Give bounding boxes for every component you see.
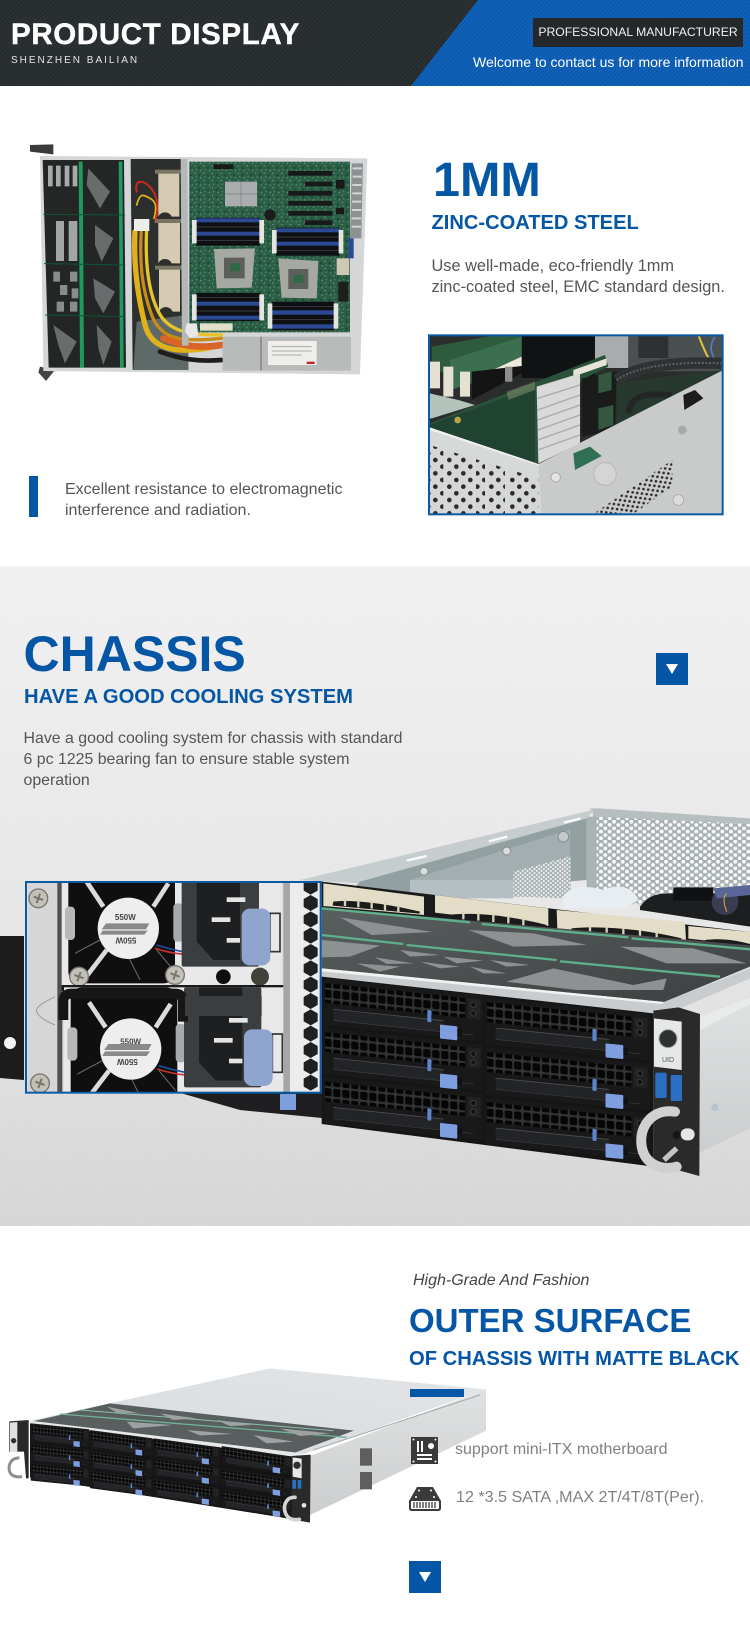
chassis walls (538, 370, 723, 515)
image: assembled server (8, 1368, 486, 1523)
side (699, 997, 750, 1153)
power supply (223, 337, 351, 371)
chassis description: operation (24, 772, 90, 788)
feature: storage (409, 1487, 704, 1511)
feature text: motherboard: support mini-ITX motherboard (455, 1440, 668, 1458)
textured grey background with server: 550W (120, 1038, 142, 1047)
textured grey background with server: 550W (115, 913, 136, 922)
textured grey background with server: UID (662, 1057, 674, 1064)
tagline: High-Grade And Fashion (413, 1272, 589, 1288)
description: zinc-coated steel, EMC standard design. (432, 278, 725, 296)
resistance text: interference and radiation. (65, 502, 251, 518)
chassis description: Have a good cooling system for chassis with standard (24, 730, 402, 746)
accent bar (29, 476, 38, 517)
front (322, 977, 653, 1167)
contact line: Welcome to contact us for more information (473, 54, 744, 70)
panel: zinc-coated steel (29, 144, 725, 518)
badge: professional manufacturer: PROFESSIONAL MANUFACTURER (538, 25, 738, 39)
feature: motherboard (411, 1437, 668, 1464)
textured grey background with server (0, 566, 750, 1226)
resistance text: Excellent resistance to electromagnetic (65, 480, 342, 498)
resistance text (65, 480, 342, 518)
big number heading: 1MM (433, 153, 541, 207)
description: Use well-made, eco-friendly 1mm (432, 256, 674, 274)
rear frame (590, 808, 750, 907)
panel: chassis (0, 566, 750, 1226)
rear IO slats (350, 163, 363, 238)
chassis description (24, 730, 402, 788)
image: open chassis top view (30, 144, 368, 381)
subtitle: SHENZHEN BAILIAN (11, 54, 139, 66)
textured grey background with server: 550W (116, 1057, 138, 1066)
lip (322, 968, 750, 1014)
outer surface heading: OUTER SURFACE (409, 1302, 691, 1339)
icon: down arrow (409, 1561, 441, 1593)
panel: outer surface (8, 1272, 740, 1593)
badge: professional manufacturer (533, 18, 743, 47)
handle ear (653, 1007, 700, 1176)
icon: hard drive (409, 1487, 441, 1511)
feature text: storage: 12 *3.5 SATA ,MAX 2T/4T/8T(Per). (456, 1488, 704, 1506)
cable bay (131, 159, 188, 370)
decals (43, 160, 126, 368)
header background: dark with blue diagonal (0, 0, 750, 86)
title: PRODUCT DISPLAY (11, 18, 300, 50)
header banner (0, 0, 750, 86)
image: card closeup (428, 334, 724, 516)
fan ducts (322, 882, 750, 947)
chassis description: 6 pc 1225 bearing fan to ensure stable system (24, 750, 349, 768)
description (432, 256, 725, 296)
subheading: ZINC-COATED STEEL (432, 212, 639, 234)
outer surface subheading: OF CHASSIS WITH MATTE BLACK (409, 1348, 739, 1370)
motherboard (189, 162, 350, 332)
icon: down arrow (656, 653, 688, 685)
chassis subheading: HAVE A GOOD COOLING SYSTEM (24, 686, 353, 708)
chassis heading: CHASSIS (24, 626, 246, 682)
rear of server under inset (170, 1090, 322, 1118)
icon: motherboard (411, 1437, 438, 1464)
textured grey background with server: 550W (115, 935, 136, 944)
accent bar (410, 1389, 464, 1397)
decal top (322, 907, 750, 1002)
